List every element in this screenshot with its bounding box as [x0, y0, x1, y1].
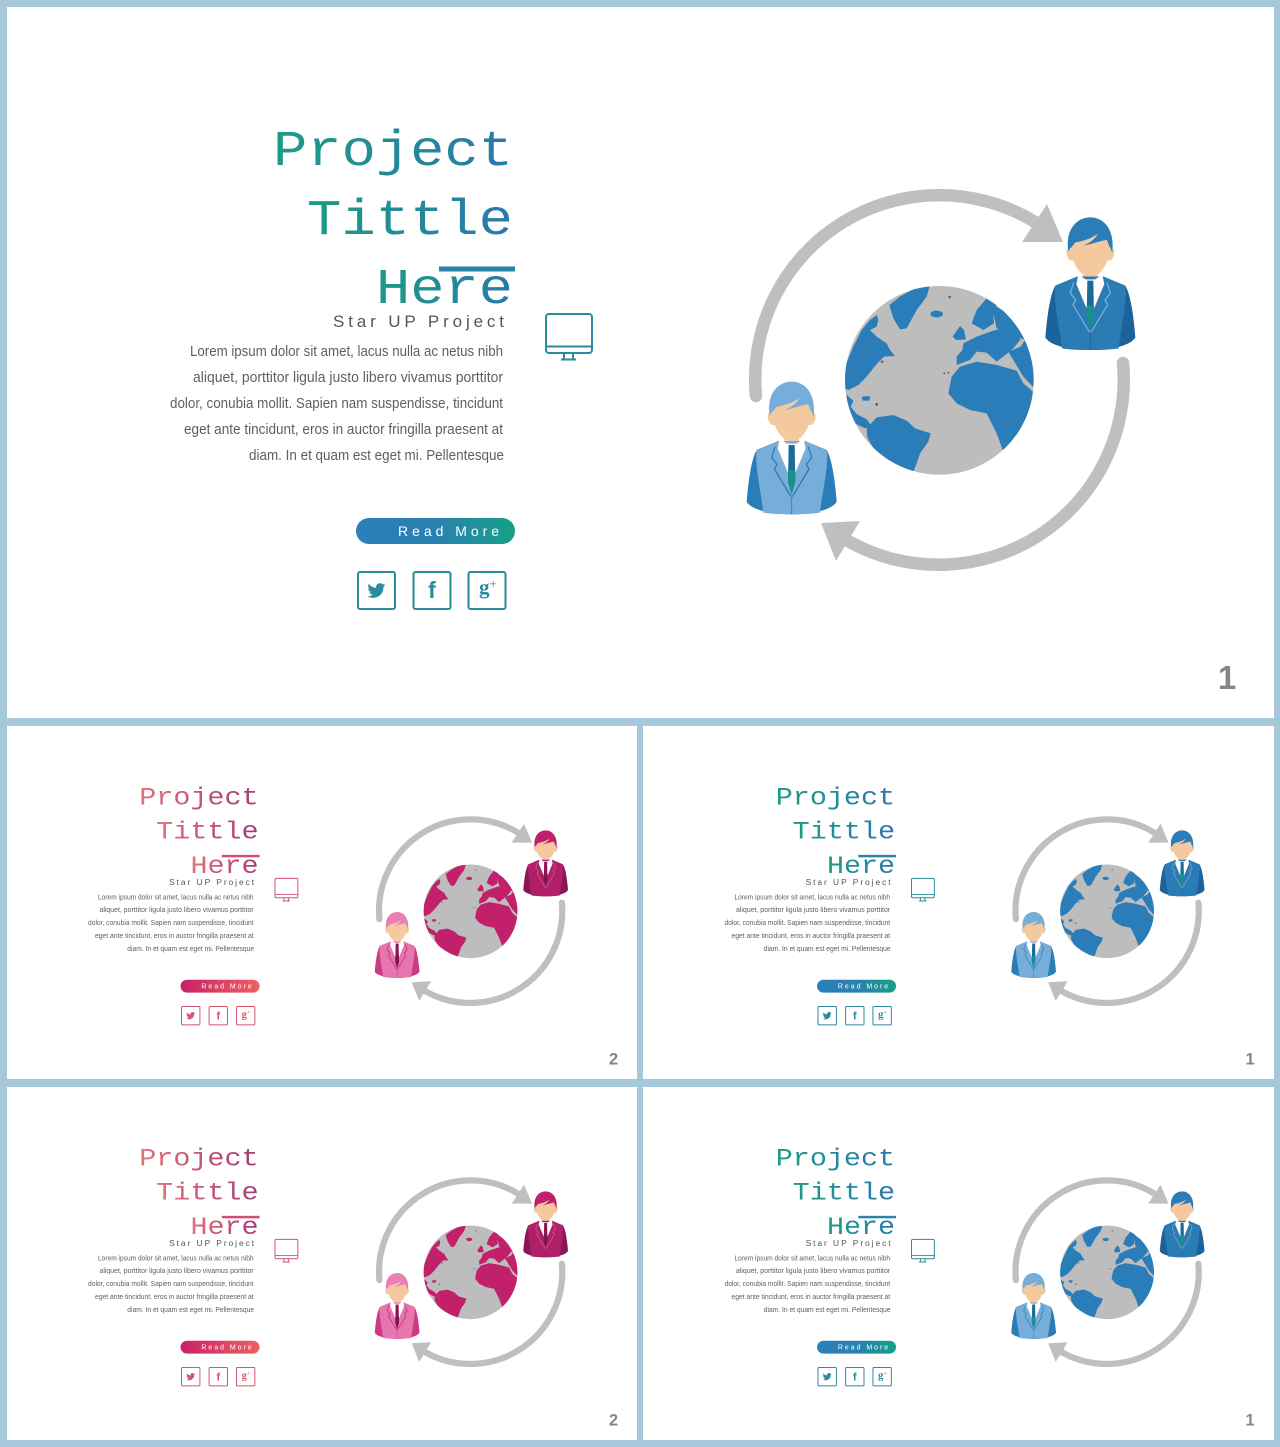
social icons — [182, 1368, 255, 1386]
social icons: + — [247, 1009, 251, 1016]
body text: Lorem ipsum dolor sit amet, lacus nulla ac netus nibh — [98, 1253, 254, 1262]
title — [139, 1145, 259, 1242]
social icons: f — [216, 1010, 220, 1022]
body text: diam. In et quam est eget mi. Pellentesque — [764, 944, 891, 953]
body text: dolor, conubia mollit. Sapien nam suspendisse, tincidunt — [725, 1279, 891, 1288]
read more button — [181, 980, 260, 993]
body text: aliquet, porttitor ligula justo libero vivamus porttitor — [736, 1266, 891, 1275]
title — [139, 784, 259, 881]
title: Tittle — [156, 1180, 259, 1208]
illustration: globe, people and arrows — [747, 195, 1135, 565]
read more button: Read More — [201, 984, 252, 991]
icon: google plus: g — [479, 575, 490, 599]
icon: facebook: f — [428, 577, 436, 603]
slide contents — [88, 784, 618, 1069]
body text: diam. In et quam est eget mi. Pellentesque — [127, 944, 254, 953]
social icons: g — [242, 1370, 248, 1381]
body text: Lorem ipsum dolor sit amet, lacus nulla ac netus nibh — [98, 892, 254, 901]
page number: 2 — [609, 1412, 618, 1430]
body text: aliquet, porttitor ligula justo libero vivamus porttitor — [193, 369, 503, 386]
read more button — [817, 1341, 896, 1354]
social icons — [182, 1007, 255, 1025]
social icons: f — [853, 1371, 857, 1383]
body text: dolor, conubia mollit. Sapien nam suspendisse, tincidunt — [88, 1279, 254, 1288]
illustration: globe, people and arrows — [1011, 1180, 1205, 1364]
illustration: globe, people and arrows — [375, 1180, 568, 1364]
read more button: Read More — [838, 984, 888, 991]
social icons: f — [853, 1010, 857, 1022]
title overline — [222, 855, 260, 857]
title: Project — [776, 784, 895, 812]
body text: eget ante tincidunt, eros in auctor fringilla praesent at — [732, 1292, 891, 1301]
title: Tittle — [307, 193, 513, 250]
title overline — [858, 1216, 896, 1218]
page number: 1 — [1246, 1051, 1255, 1069]
title: Tittle — [156, 819, 259, 847]
icon: facebook — [414, 572, 450, 609]
body text: diam. In et quam est eget mi. Pellentesque — [127, 1305, 254, 1314]
body text — [725, 1253, 891, 1314]
icon: google plus: + — [490, 576, 497, 591]
panel: slide top left, pink — [7, 726, 637, 1079]
social icons — [358, 572, 506, 609]
icon: monitor — [546, 314, 592, 360]
panel: slide bottom right, teal — [643, 1087, 1274, 1440]
title: Tittle — [793, 1180, 895, 1208]
title overline — [858, 855, 896, 857]
body text: aliquet, porttitor ligula justo libero vivamus porttitor — [99, 905, 254, 914]
body text: Lorem ipsum dolor sit amet, lacus nulla ac netus nibh — [190, 343, 503, 360]
slide contents — [725, 1145, 1255, 1430]
social icons: + — [883, 1009, 887, 1016]
slide contents — [725, 784, 1255, 1069]
icon: monitor — [275, 1239, 298, 1262]
subtitle: Star UP Project — [169, 1238, 255, 1248]
panel: main slide, teal — [7, 7, 1274, 718]
body text — [88, 892, 254, 953]
illustration: globe, people and arrows — [375, 819, 568, 1003]
title: Here — [190, 853, 259, 881]
title: Here — [190, 1214, 259, 1242]
social icons: g — [242, 1009, 248, 1020]
subtitle: Star UP Project — [333, 312, 504, 331]
panel: slide bottom left, pink — [7, 1087, 637, 1440]
body text: eget ante tincidunt, eros in auctor fringilla praesent at — [184, 421, 504, 438]
social icons: + — [247, 1370, 251, 1377]
social icons — [818, 1368, 891, 1386]
body text — [170, 343, 504, 464]
read more button: Read More — [398, 523, 499, 539]
title — [776, 1145, 895, 1242]
body text: dolor, conubia mollit. Sapien nam suspendisse, tincidunt — [88, 918, 254, 927]
page number: 1 — [1246, 1412, 1255, 1430]
title: Project — [776, 1145, 895, 1173]
body text: Lorem ipsum dolor sit amet, lacus nulla ac netus nibh — [734, 1253, 890, 1262]
body text: dolor, conubia mollit. Sapien nam suspendisse, tincidunt — [170, 395, 504, 412]
read more button — [181, 1341, 260, 1354]
title: Here — [827, 1214, 895, 1242]
read more button: Read More — [838, 1345, 888, 1352]
title overline — [439, 266, 515, 272]
social icons: g — [878, 1370, 884, 1381]
body text: diam. In et quam est eget mi. Pellentesque — [249, 447, 504, 464]
read more button — [356, 518, 515, 544]
page number: 2 — [609, 1051, 618, 1069]
icon: google plus — [468, 572, 506, 609]
social icons: + — [883, 1370, 887, 1377]
subtitle: Star UP Project — [169, 877, 255, 887]
title overline — [222, 1216, 260, 1218]
body text: aliquet, porttitor ligula justo libero vivamus porttitor — [736, 905, 891, 914]
body text: aliquet, porttitor ligula justo libero vivamus porttitor — [99, 1266, 254, 1275]
read more button — [817, 980, 896, 993]
panel: slide top right, teal — [643, 726, 1274, 1079]
body text: eget ante tincidunt, eros in auctor fringilla praesent at — [95, 1292, 254, 1301]
read more button: Read More — [201, 1345, 252, 1352]
social icons: f — [216, 1371, 220, 1383]
subtitle: Star UP Project — [806, 1238, 891, 1248]
body text: diam. In et quam est eget mi. Pellentesque — [764, 1305, 891, 1314]
body text — [725, 892, 891, 953]
title — [273, 124, 513, 319]
social icons — [818, 1007, 891, 1025]
illustration: globe, people and arrows — [1011, 819, 1205, 1003]
title: Here — [827, 853, 895, 881]
body text: eget ante tincidunt, eros in auctor fringilla praesent at — [95, 931, 254, 940]
slide contents — [88, 1145, 618, 1430]
page number: 1 — [1218, 659, 1236, 696]
icon: twitter — [358, 572, 395, 609]
icon: monitor — [911, 878, 934, 901]
title: Project — [139, 1145, 259, 1173]
body text: eget ante tincidunt, eros in auctor fringilla praesent at — [732, 931, 891, 940]
title: Project — [273, 124, 513, 181]
body text: Lorem ipsum dolor sit amet, lacus nulla ac netus nibh — [734, 892, 890, 901]
subtitle: Star UP Project — [806, 877, 891, 887]
title: Here — [376, 262, 513, 319]
icon: monitor — [275, 878, 298, 901]
icon: monitor — [911, 1239, 934, 1262]
social icons: g — [878, 1009, 884, 1020]
body text — [88, 1253, 254, 1314]
title — [776, 784, 895, 881]
title: Tittle — [793, 819, 895, 847]
body text: dolor, conubia mollit. Sapien nam suspendisse, tincidunt — [725, 918, 891, 927]
title: Project — [139, 784, 259, 812]
